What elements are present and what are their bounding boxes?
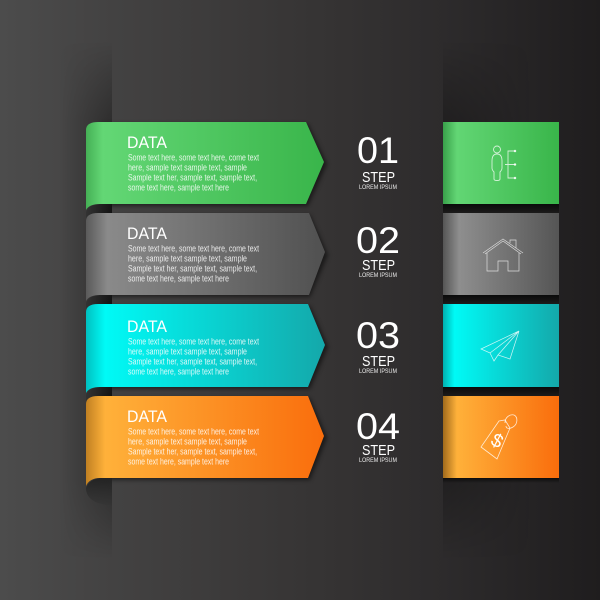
body text: Sample text her, sample text, sample text,: [128, 446, 257, 456]
heading: DATA: [127, 407, 168, 426]
step label 02: STEP: [362, 258, 395, 274]
body text: [128, 426, 259, 466]
panel: icon card 4: [443, 396, 559, 483]
body text: [128, 152, 259, 192]
body text: Sample text her, sample text, sample text,: [128, 172, 257, 182]
step label 01: 01: [357, 130, 399, 171]
icon: house: [483, 239, 523, 271]
body text: some text here, sample text here: [128, 274, 229, 284]
body text: here, sample text sample text, sample: [128, 346, 247, 356]
body text: Some text here, some text here, come text: [128, 336, 259, 346]
panel: step 2 ribbon: [86, 213, 328, 311]
panel: step 3 ribbon: [86, 304, 328, 403]
body text: some text here, sample text here: [128, 366, 229, 376]
panel: step 4 ribbon: [86, 396, 327, 505]
body text: Sample text her, sample text, sample text,: [128, 356, 257, 366]
heading: DATA: [127, 133, 168, 152]
icon: paper plane: [481, 331, 519, 361]
heading: DATA: [127, 224, 168, 243]
body text: some text here, sample text here: [128, 456, 229, 466]
body text: some text here, sample text here: [128, 182, 229, 192]
body text: here, sample text sample text, sample: [128, 162, 247, 172]
step label 01: STEP: [362, 170, 395, 186]
step label 01: [357, 130, 399, 191]
icon: price tag: [481, 415, 517, 459]
step label 04: STEP: [362, 443, 395, 459]
step label 02: 02: [356, 220, 400, 261]
step label 04: [356, 406, 400, 464]
step label 03: STEP: [362, 354, 395, 370]
body text: [128, 244, 259, 284]
icon: person with branches: [492, 146, 516, 180]
body text: [128, 336, 259, 376]
body text: Some text here, some text here, come text: [128, 152, 259, 162]
step label 04: 04: [356, 406, 400, 447]
panel: icon card 2: [443, 213, 559, 304]
panel: step 1 ribbon: [86, 122, 327, 220]
body text: here, sample text sample text, sample: [128, 254, 247, 264]
step label 03: LOREM IPSUM: [359, 368, 397, 375]
panel: icon card 1: [443, 122, 559, 213]
body text: Some text here, some text here, come text: [128, 244, 259, 254]
panel: icon card 3: [443, 304, 559, 396]
step label 02: [356, 220, 400, 279]
step label 04: LOREM IPSUM: [359, 457, 397, 464]
step label 03: 03: [356, 315, 400, 356]
body text: here, sample text sample text, sample: [128, 436, 247, 446]
body text: Sample text her, sample text, sample text,: [128, 264, 257, 274]
step label 02: LOREM IPSUM: [359, 272, 397, 279]
dollar sign: $: [487, 430, 507, 453]
body text: Some text here, some text here, come text: [128, 426, 259, 436]
heading: DATA: [127, 317, 168, 336]
step label 01: LOREM IPSUM: [359, 184, 397, 191]
step label 03: [356, 315, 400, 375]
